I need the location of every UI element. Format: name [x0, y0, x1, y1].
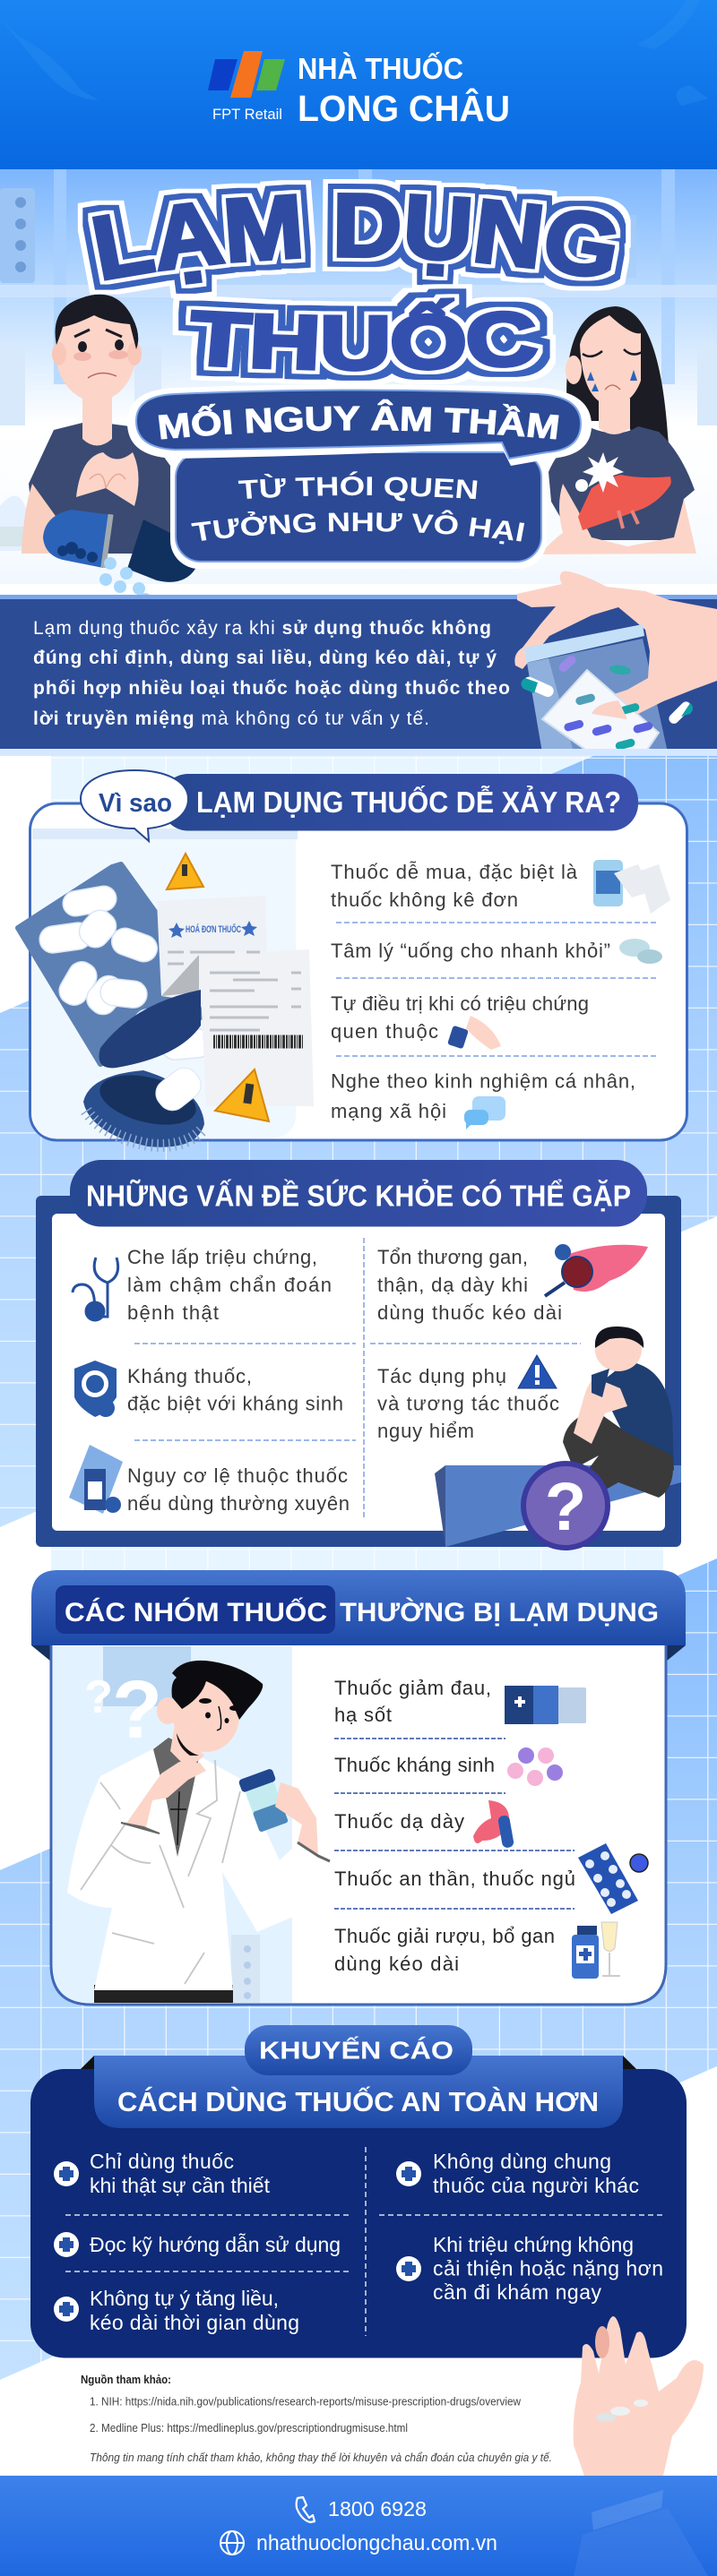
reason list: Thuốc dễ mua, đặc biệt là	[331, 861, 578, 883]
icon: chat bubbles	[464, 1096, 505, 1129]
recommendation list: Đọc kỹ hướng dẫn sử dụng	[90, 2233, 341, 2256]
illustration: pill bottle, receipts, warning signs: HOÁ ĐƠN THUỐC	[186, 923, 241, 935]
reason list: mạng xã hội	[331, 1100, 446, 1122]
intro text: Lạm dụng thuốc xảy ra khi sử dụng thuốc không	[33, 618, 491, 639]
header band	[0, 0, 717, 169]
problem list: Kháng thuốc,	[127, 1365, 252, 1387]
icon: antibiotic tablets	[507, 1747, 563, 1786]
heading bar: vì sao lạm dụng thuốc dễ xảy ra: LẠM DỤNG THUỐC DỄ XẢY RA?	[196, 785, 621, 819]
folded corner ribbon	[435, 1465, 681, 1547]
recommendation list: cần đi khám ngay	[433, 2280, 602, 2304]
brand name	[298, 51, 510, 129]
panel heading: CÁCH DÙNG THUỐC AN TOÀN HƠN	[117, 2085, 599, 2117]
brand name: NHÀ THUỐC	[298, 51, 463, 85]
icon: question mark badge: ?	[545, 1469, 586, 1545]
icon: medicine bottle and prescriptions	[593, 860, 670, 914]
problem list: dùng thuốc kéo dài	[377, 1301, 562, 1324]
panel header: CÁC NHÓM THUỐC	[65, 1597, 327, 1627]
illustration: sick person sitting	[563, 1327, 674, 1500]
subtitle box: từ thói quen tưởng như vô hại	[170, 451, 546, 569]
icon: globe	[220, 2531, 244, 2555]
illustration: open hand with tablets	[574, 2316, 704, 2476]
problem list: Tác dụng phụ	[377, 1365, 506, 1387]
watermark: store sign	[574, 2490, 708, 2576]
recommendation list: Chỉ dùng thuốc	[90, 2150, 234, 2173]
logo: FPT Retail	[208, 51, 285, 123]
icon: tablets	[619, 939, 662, 964]
illustration: hand with pill bag	[514, 571, 717, 749]
drug group list: Thuốc giải rượu, bổ gan	[334, 1925, 555, 1947]
icon: stethoscope	[73, 1258, 118, 1320]
website: nhathuoclongchau.com.vn	[256, 2531, 497, 2555]
illustration: confused pharmacist: ?	[112, 1664, 162, 1756]
logo: FPT Retail: FPT Retail	[212, 106, 282, 123]
icon: question mark badge	[521, 1461, 610, 1550]
problem list: làm chậm chẩn đoán	[127, 1274, 332, 1296]
intro text: lời truyền miệng mà không có tư vấn y tế.	[33, 708, 429, 729]
recommendation list: khi thật sự cần thiết	[90, 2174, 271, 2197]
reason list	[331, 861, 658, 1122]
panel: health problems	[36, 1196, 681, 1550]
illustration: confused pharmacist: ?	[84, 1671, 113, 1723]
intro text: đúng chỉ định, dùng sai liều, dùng kéo dài, tự ý	[33, 648, 497, 668]
speech bubble: vì sao	[81, 770, 188, 841]
reason list: thuốc không kê đơn	[331, 889, 518, 911]
recommendation list: thuốc của người khác	[433, 2174, 639, 2197]
icon: sleeping pills and alarm clock	[578, 1843, 648, 1914]
badge: khuyến cáo: KHUYẾN CÁO	[259, 2037, 454, 2064]
intro band	[0, 595, 717, 749]
recommendation list: Không tự ý tăng liều,	[90, 2287, 279, 2310]
speech bubble: vì sao: Vì sao	[99, 789, 172, 818]
problem list: và tương tác thuốc	[377, 1392, 559, 1415]
icon: stomach with capsule	[473, 1800, 514, 1849]
icons: plus badges	[54, 2161, 421, 2322]
subtitle box: từ thói quen tưởng như vô hại: TỪ THÓI QUEN	[238, 471, 477, 502]
drug group list: dùng kéo dài	[334, 1953, 459, 1975]
illustration: confused pharmacist	[67, 1646, 330, 2003]
recommendation list: Khi triệu chứng không	[433, 2233, 634, 2256]
icon: warning triangle	[518, 1355, 557, 1388]
recommendation list: Không dùng chung	[433, 2150, 611, 2173]
main title: THUỐC: THUỐC	[172, 284, 556, 384]
footer	[0, 2476, 717, 2576]
illustration: sad woman holding liver	[540, 306, 696, 554]
illustration: worried man	[22, 295, 170, 554]
problem list: đặc biệt với kháng sinh	[127, 1392, 343, 1415]
main title: LẠM DỤNG: LẠM DỤNG	[77, 179, 631, 298]
problem list: Tổn thương gan,	[377, 1246, 528, 1268]
illustration: open capsule with beads	[43, 510, 197, 607]
intro text	[33, 618, 510, 729]
panel: safer use recommendations	[30, 2025, 687, 2357]
brand name: LONG CHÂU	[298, 88, 510, 129]
problem list: Nguy cơ lệ thuộc thuốc	[127, 1464, 348, 1487]
phone number: 1800 6928	[328, 2497, 427, 2520]
sources	[81, 2374, 552, 2464]
recommendation list: cải thiện hoặc nặng hơn	[433, 2257, 663, 2280]
drug group list: hạ sốt	[334, 1704, 392, 1726]
heading bar: vì sao lạm dụng thuốc dễ xảy ra	[81, 770, 638, 841]
hero background: pharmacy shelves	[0, 169, 717, 595]
reason list: Tự điều trị khi có triệu chứng	[331, 992, 589, 1015]
page background bands	[0, 702, 717, 2477]
icon: hand with pills	[447, 1016, 501, 1050]
heading pill: health problems	[70, 1160, 647, 1227]
sources: 1. NIH: https://nida.nih.gov/publications/research-reports/misuse-prescription-drugs/overview	[90, 2395, 522, 2408]
icon: blister pack and bottle	[69, 1445, 123, 1514]
speech banner: mối nguy âm thầm	[127, 384, 592, 466]
icon: shield with virus	[74, 1361, 117, 1417]
sources: Nguồn tham khảo:	[81, 2374, 171, 2386]
sources: 2. Medline Plus: https://medlineplus.gov/prescriptiondrugmisuse.html	[90, 2422, 408, 2434]
recommendation list	[65, 2147, 663, 2336]
problem list: bệnh thật	[127, 1301, 219, 1324]
drug group list: Thuốc an thần, thuốc ngủ	[334, 1868, 575, 1890]
reason list: Tâm lý “uống cho nhanh khỏi”	[331, 940, 610, 962]
problem list: nguy hiểm	[377, 1420, 474, 1442]
problem list: nếu dùng thường xuyên	[127, 1492, 350, 1515]
illustration: pill bottle, receipts, warning signs	[18, 854, 314, 1147]
icon: phone	[297, 2497, 315, 2522]
speech banner: mối nguy âm thầm: MỐI NGUY ÂM THẦM	[158, 399, 559, 439]
panel header	[31, 1570, 686, 1645]
panel: why misuse happens	[18, 803, 687, 1147]
drug group list	[334, 1677, 575, 1975]
intro text: phối hợp nhiều loại thuốc hoặc dùng thuốc theo	[33, 678, 510, 699]
icon: painkiller box	[505, 1686, 586, 1724]
sources: Thông tin mang tính chất tham khảo, không thay thế lời khuyên và chẩn đoán của chuyên gia y tế.	[90, 2451, 552, 2464]
drug group list: Thuốc giảm đau,	[334, 1677, 491, 1699]
badge: khuyến cáo	[245, 2025, 472, 2075]
heading pill: health problems: NHỮNG VẤN ĐỀ SỨC KHỎE CÓ THỂ GẶP	[86, 1179, 631, 1213]
panel: commonly misused drug groups	[31, 1570, 686, 2005]
panel heading	[94, 2056, 623, 2128]
drug group list: Thuốc dạ dày	[334, 1810, 464, 1833]
reason list: quen thuộc	[331, 1020, 438, 1043]
icon: damaged liver with magnifier	[545, 1244, 648, 1296]
problem list: thận, dạ dày khi	[377, 1274, 528, 1296]
problem list	[127, 1238, 581, 1517]
problem list: Che lấp triệu chứng,	[127, 1246, 317, 1268]
icon: liver tonic bottle and wine glass	[572, 1922, 620, 1979]
recommendation list: kéo dài thời gian dùng	[90, 2311, 299, 2334]
reason list: Nghe theo kinh nghiệm cá nhân,	[331, 1069, 635, 1093]
drug group list: Thuốc kháng sinh	[334, 1754, 495, 1776]
subtitle box: từ thói quen tưởng như vô hại: TƯỞNG NHƯ VÔ HẠI	[191, 510, 524, 545]
panel header: THƯỜNG BỊ LẠM DỤNG	[340, 1597, 659, 1627]
illustration backdrop: shelf	[32, 831, 296, 1138]
